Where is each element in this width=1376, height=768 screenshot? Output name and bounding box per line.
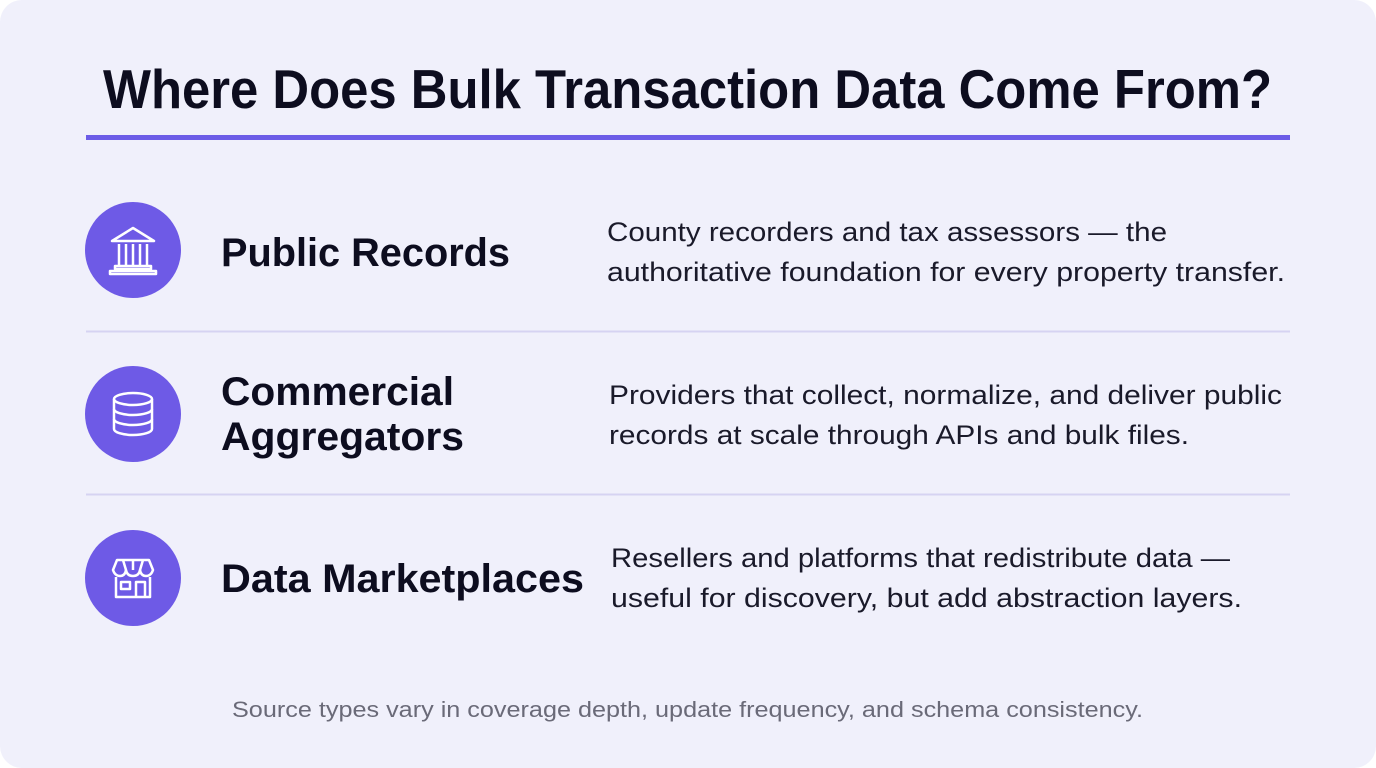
heading: public records: Public Records <box>221 231 510 275</box>
description: public records <box>607 217 1285 287</box>
description: data marketplaces: Resellers and platforms that redistribute data — <box>611 543 1230 573</box>
heading: data marketplaces: Data Marketplaces <box>221 557 584 601</box>
description: commercial aggregators: Providers that collect, normalize, and deliver public <box>609 380 1282 410</box>
icon: bank <box>85 202 181 298</box>
row: commercial aggregators <box>85 366 1282 462</box>
description: commercial aggregators <box>609 380 1282 450</box>
description: data marketplaces <box>611 543 1242 613</box>
row: data marketplaces <box>85 530 1242 626</box>
icon: storefront <box>85 530 181 626</box>
title: Where Does Bulk Transaction Data Come From? <box>103 58 1272 120</box>
row: public records <box>85 202 1285 298</box>
footer note: Source types vary in coverage depth, update frequency, and schema consistency. <box>232 697 1143 722</box>
description: commercial aggregators: records at scale through APIs and bulk files. <box>609 420 1189 450</box>
heading: commercial aggregators <box>221 370 464 459</box>
icon: database <box>85 366 181 462</box>
description: public records: authoritative foundation for every property transfer. <box>607 257 1285 287</box>
description: public records: County recorders and tax assessors — the <box>607 217 1167 247</box>
heading: commercial aggregators: Commercial <box>221 370 454 414</box>
description: data marketplaces: useful for discovery, but add abstraction layers. <box>611 583 1242 613</box>
heading: commercial aggregators: Aggregators <box>221 415 464 459</box>
